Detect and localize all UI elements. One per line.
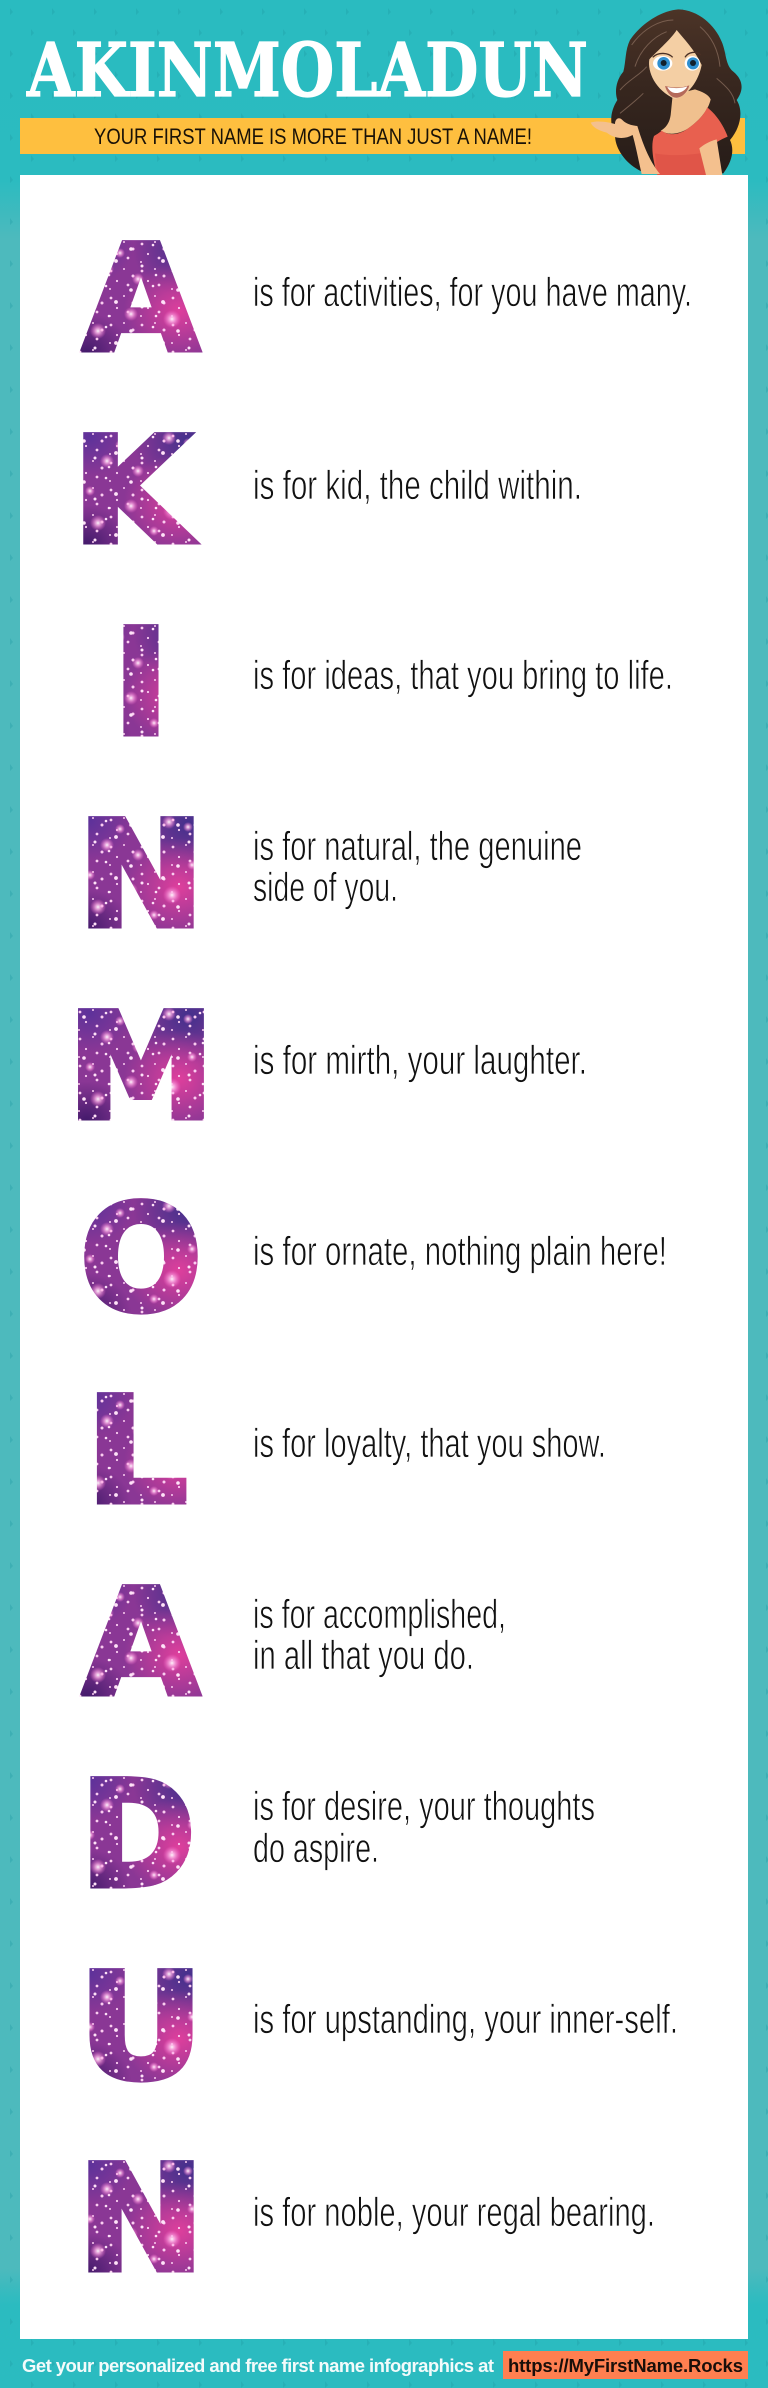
row 5: letter M — [68, 982, 587, 1152]
left arm and hand — [591, 118, 660, 174]
row 5: letter M: is for mirth, your laughter. — [253, 1037, 587, 1083]
row 9: letter D: D — [80, 1750, 196, 1920]
row 11: letter N — [78, 2134, 655, 2304]
row 9: letter D: is for desire, your thoughts — [253, 1783, 595, 1829]
footer link button: https://MyFirstName.Rocks — [508, 2355, 743, 2376]
row 4: letter N — [78, 790, 582, 960]
row 6: letter O: O — [80, 1174, 202, 1344]
row 7: letter L — [86, 1366, 606, 1536]
neck and chest — [661, 89, 711, 134]
row 9: letter D: do aspire. — [253, 1825, 379, 1871]
shirt — [652, 107, 728, 175]
eyes — [653, 56, 672, 71]
row 1: letter A — [83, 214, 692, 384]
row 3: letter I — [112, 598, 673, 768]
footer text: Get your personalized and free first name infographics at — [22, 2355, 494, 2376]
right arm — [699, 139, 722, 175]
mouth — [665, 85, 689, 98]
row 7: letter L: is for loyalty, that you show. — [253, 1420, 606, 1466]
row 4: letter N: N — [78, 790, 204, 960]
title: AKINMOLADUN — [26, 28, 588, 114]
row 8: letter A: in all that you do. — [253, 1632, 474, 1678]
row 2: letter K: is for kid, the child within. — [253, 462, 582, 508]
row 2: letter K: K — [72, 406, 195, 576]
row 7: letter L: L — [86, 1366, 188, 1536]
row 11: letter N: N — [78, 2134, 204, 2304]
row 9: letter D — [80, 1750, 595, 1920]
row 8: letter A: is for accomplished, — [253, 1591, 506, 1637]
row 2: letter K — [72, 406, 582, 576]
row 10: letter U: U — [78, 1942, 204, 2112]
row 3: letter I: I — [112, 598, 170, 768]
face — [649, 30, 702, 99]
icon: cartoon woman — [591, 9, 742, 175]
row 5: letter M: M — [68, 982, 214, 1152]
tagline banner — [20, 118, 745, 154]
row 1: letter A: A — [83, 214, 199, 384]
row 6: letter O — [80, 1174, 667, 1344]
row 4: letter N: is for natural, the genuine — [253, 823, 582, 869]
tagline banner: YOUR FIRST NAME IS MORE THAN JUST A NAME! — [94, 124, 532, 149]
row 8: letter A — [83, 1558, 506, 1728]
row 4: letter N: side of you. — [253, 864, 398, 910]
row 10: letter U — [78, 1942, 678, 2112]
row 8: letter A: A — [83, 1558, 199, 1728]
